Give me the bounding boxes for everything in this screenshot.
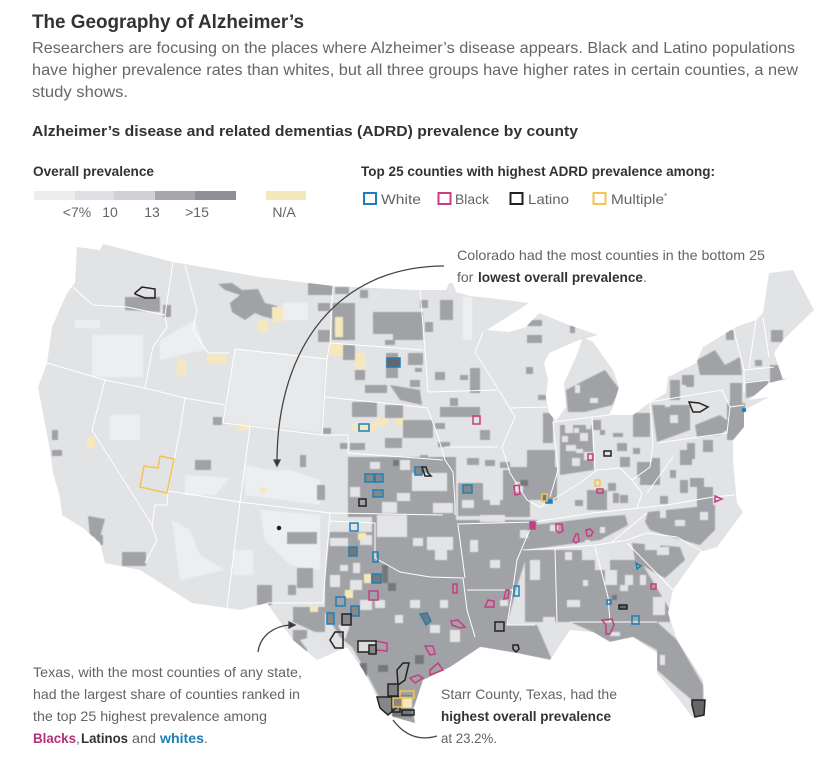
legend: top 25 counties: Top 25 counties with highest ADRD prevalence among: — [361, 164, 715, 179]
callout: Starr County: Starr County, Texas, had the — [441, 686, 617, 702]
county outlines: white — [327, 358, 746, 625]
county outlines: latino — [135, 287, 708, 717]
lower prevalence holes in the high prevalence areas — [300, 385, 708, 665]
intro text: study shows. — [32, 84, 128, 101]
legend: overall prevalence — [33, 164, 306, 220]
callout: Colorado: . — [643, 269, 647, 285]
callout: Texas: . — [204, 730, 208, 746]
highest prevalence counties — [360, 460, 617, 717]
callout: Starr County: highest overall prevalence — [441, 708, 611, 724]
chart subtitle: Alzheimer’s disease and related dementias (ADRD) prevalence by county — [32, 123, 579, 140]
callout: Texas: and — [132, 730, 156, 746]
arrow: Colorado callout — [274, 266, 444, 466]
callout: Texas: whites — [159, 730, 204, 746]
legend: overall prevalence: N/A — [272, 204, 296, 220]
not available counties — [87, 307, 412, 708]
legend: top 25 counties: * — [664, 192, 667, 201]
callout: Starr County: at 23.2%. — [441, 730, 497, 746]
legend: overall prevalence: 10 — [102, 204, 118, 220]
legend: top 25 counties: Latino — [528, 191, 569, 207]
legend: overall prevalence: Overall prevalence — [33, 164, 154, 179]
legend: top 25 counties — [361, 164, 715, 207]
callout: Colorado: Colorado had the most counties in the bottom 25 — [457, 247, 765, 263]
legend: overall prevalence: 13 — [144, 204, 160, 220]
legend: top 25 counties: White — [381, 191, 421, 207]
legend: overall prevalence: >15 — [185, 204, 209, 220]
high prevalence counties — [52, 283, 785, 725]
callout: Texas: Texas, with the most counties of any state, — [33, 664, 302, 680]
callout: Texas: Latinos — [81, 730, 128, 746]
legend: top 25 counties: Black — [455, 191, 490, 207]
callout: Colorado — [457, 247, 765, 285]
lightest prevalence areas — [75, 297, 472, 580]
callout: Texas: had the largest share of counties ranked in — [33, 686, 300, 702]
county outlines: multiple — [140, 456, 600, 707]
legend: overall prevalence: <7% — [63, 204, 91, 220]
title: The Geography of Alzheimer’s — [32, 12, 304, 33]
callout: Texas: Blacks — [33, 730, 76, 746]
intro text: Researchers are focusing on the places where Alzheimer’s disease appears. Black and Latino populations — [32, 40, 795, 57]
callout: Texas: , — [76, 730, 80, 746]
county outlines: black — [369, 416, 722, 683]
legend: top 25 counties: Multiple — [611, 191, 664, 207]
callout: Colorado: for — [457, 269, 474, 285]
intro text — [32, 40, 798, 101]
intro text: have higher prevalence rates than whites, but all three groups have higher rates in certain counties, a new — [32, 62, 798, 79]
callout: Texas: the top 25 highest prevalence among — [33, 708, 267, 724]
callout: Starr County — [441, 686, 617, 746]
Wyoming tone — [225, 349, 325, 432]
map of the United States — [30, 240, 820, 730]
state borders — [47, 262, 774, 637]
callout: Texas — [33, 664, 302, 746]
arrow: Starr County callout — [393, 720, 437, 738]
arrow: Texas callout — [258, 622, 295, 652]
callout: Colorado: lowest overall prevalence — [478, 269, 643, 285]
